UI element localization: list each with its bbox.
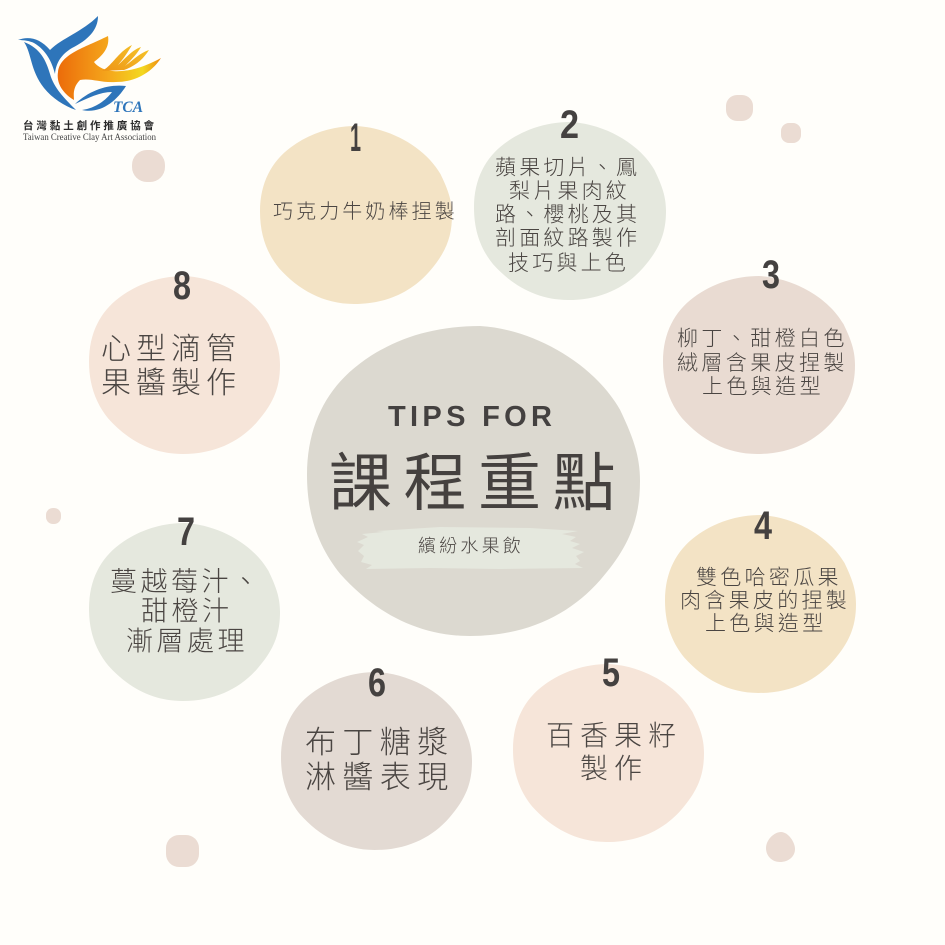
blob 3: [663, 276, 855, 454]
decorative dot bottom right: [766, 832, 795, 862]
blob 5: [513, 664, 704, 842]
panel: item 2: [474, 103, 666, 300]
text 4: 肉含果皮的捏製: [680, 590, 850, 612]
text 7: 蔓越莓汁、: [110, 567, 262, 597]
panel: item 3: [663, 253, 855, 454]
logo: [18, 16, 161, 142]
decorative dot top right small: [781, 123, 801, 143]
text 3: 上色與造型: [702, 376, 824, 398]
blob 6: [281, 672, 472, 850]
text 8: 心型滴管: [101, 333, 241, 366]
blob 1: [260, 126, 452, 304]
brush stroke banner: [357, 527, 584, 569]
text 4: [680, 566, 850, 636]
text 6: [305, 725, 455, 795]
text 3: 絨層含果皮捏製: [677, 352, 848, 375]
text 5: 製作: [580, 753, 648, 784]
blob 8: [89, 276, 280, 454]
decorative dot left: [46, 508, 61, 524]
text 5: [546, 720, 682, 784]
number 4: 4: [754, 504, 773, 548]
logo: fingers: [102, 45, 149, 71]
panel: item 5: [513, 651, 704, 842]
number 7: 7: [177, 510, 195, 554]
text 4: 上色與造型: [705, 612, 826, 636]
text 7: [110, 567, 262, 656]
panel: item 1: [260, 116, 458, 304]
number 6: 6: [368, 661, 386, 705]
text 5: 百香果籽: [546, 720, 682, 751]
text 2: 技巧與上色: [508, 252, 629, 275]
text 7: 漸層處理: [126, 626, 248, 656]
text 2: 梨片果肉紋: [509, 180, 630, 203]
text 2: [495, 156, 640, 275]
text 1: 巧克力牛奶棒捏製: [273, 200, 458, 223]
logo: blue dove wing: [18, 16, 98, 74]
logo: english name: Taiwan Creative Clay Art Association: [23, 132, 156, 142]
logo: orange hand: [58, 36, 161, 100]
blob 4: [665, 515, 856, 693]
text 3: [677, 328, 848, 398]
panel: item 6: [281, 661, 472, 850]
text 6: 布丁糖漿: [305, 725, 455, 760]
subtitle: 繽紛水果飲: [418, 536, 524, 556]
center blob: [307, 326, 640, 636]
logo: blue dove body: [24, 42, 76, 110]
logo: blue leaf: [75, 86, 126, 111]
logo: chinese name: 台灣黏土創作推廣協會: [23, 119, 157, 132]
number 2: 2: [560, 103, 579, 147]
text 2: 路、櫻桃及其: [495, 204, 640, 226]
heading: tips for: TIPS FOR: [388, 401, 552, 433]
heading: main title: 課程重點: [329, 449, 627, 519]
blob 2: [474, 122, 666, 300]
text 2: 剖面紋路製作: [495, 227, 640, 250]
text 2: 蘋果切片、鳳: [495, 156, 640, 180]
text 7: 甜橙汁: [141, 596, 232, 626]
number 3: 3: [762, 253, 780, 297]
text 6: 淋醬表現: [305, 760, 455, 795]
panel: item 4: [665, 504, 856, 693]
text 4: 雙色哈密瓜果: [696, 566, 842, 590]
text 8: 果醬製作: [101, 367, 241, 400]
text 3: 柳丁、甜橙白色: [677, 328, 848, 350]
panel: item 1: 1: [350, 116, 361, 160]
panel: item 7: [89, 510, 280, 701]
decorative dot top right large: [726, 95, 753, 121]
decorative dot bottom left: [166, 835, 199, 867]
blob 7: [89, 523, 280, 701]
number 5: 5: [602, 651, 620, 695]
text 8: [101, 333, 241, 400]
number 8: 8: [173, 264, 191, 308]
decorative dot top left: [132, 150, 165, 182]
logo: TCA letters: TCA: [113, 99, 143, 116]
panel: item 8: [89, 264, 280, 454]
panel: center: [307, 326, 640, 636]
